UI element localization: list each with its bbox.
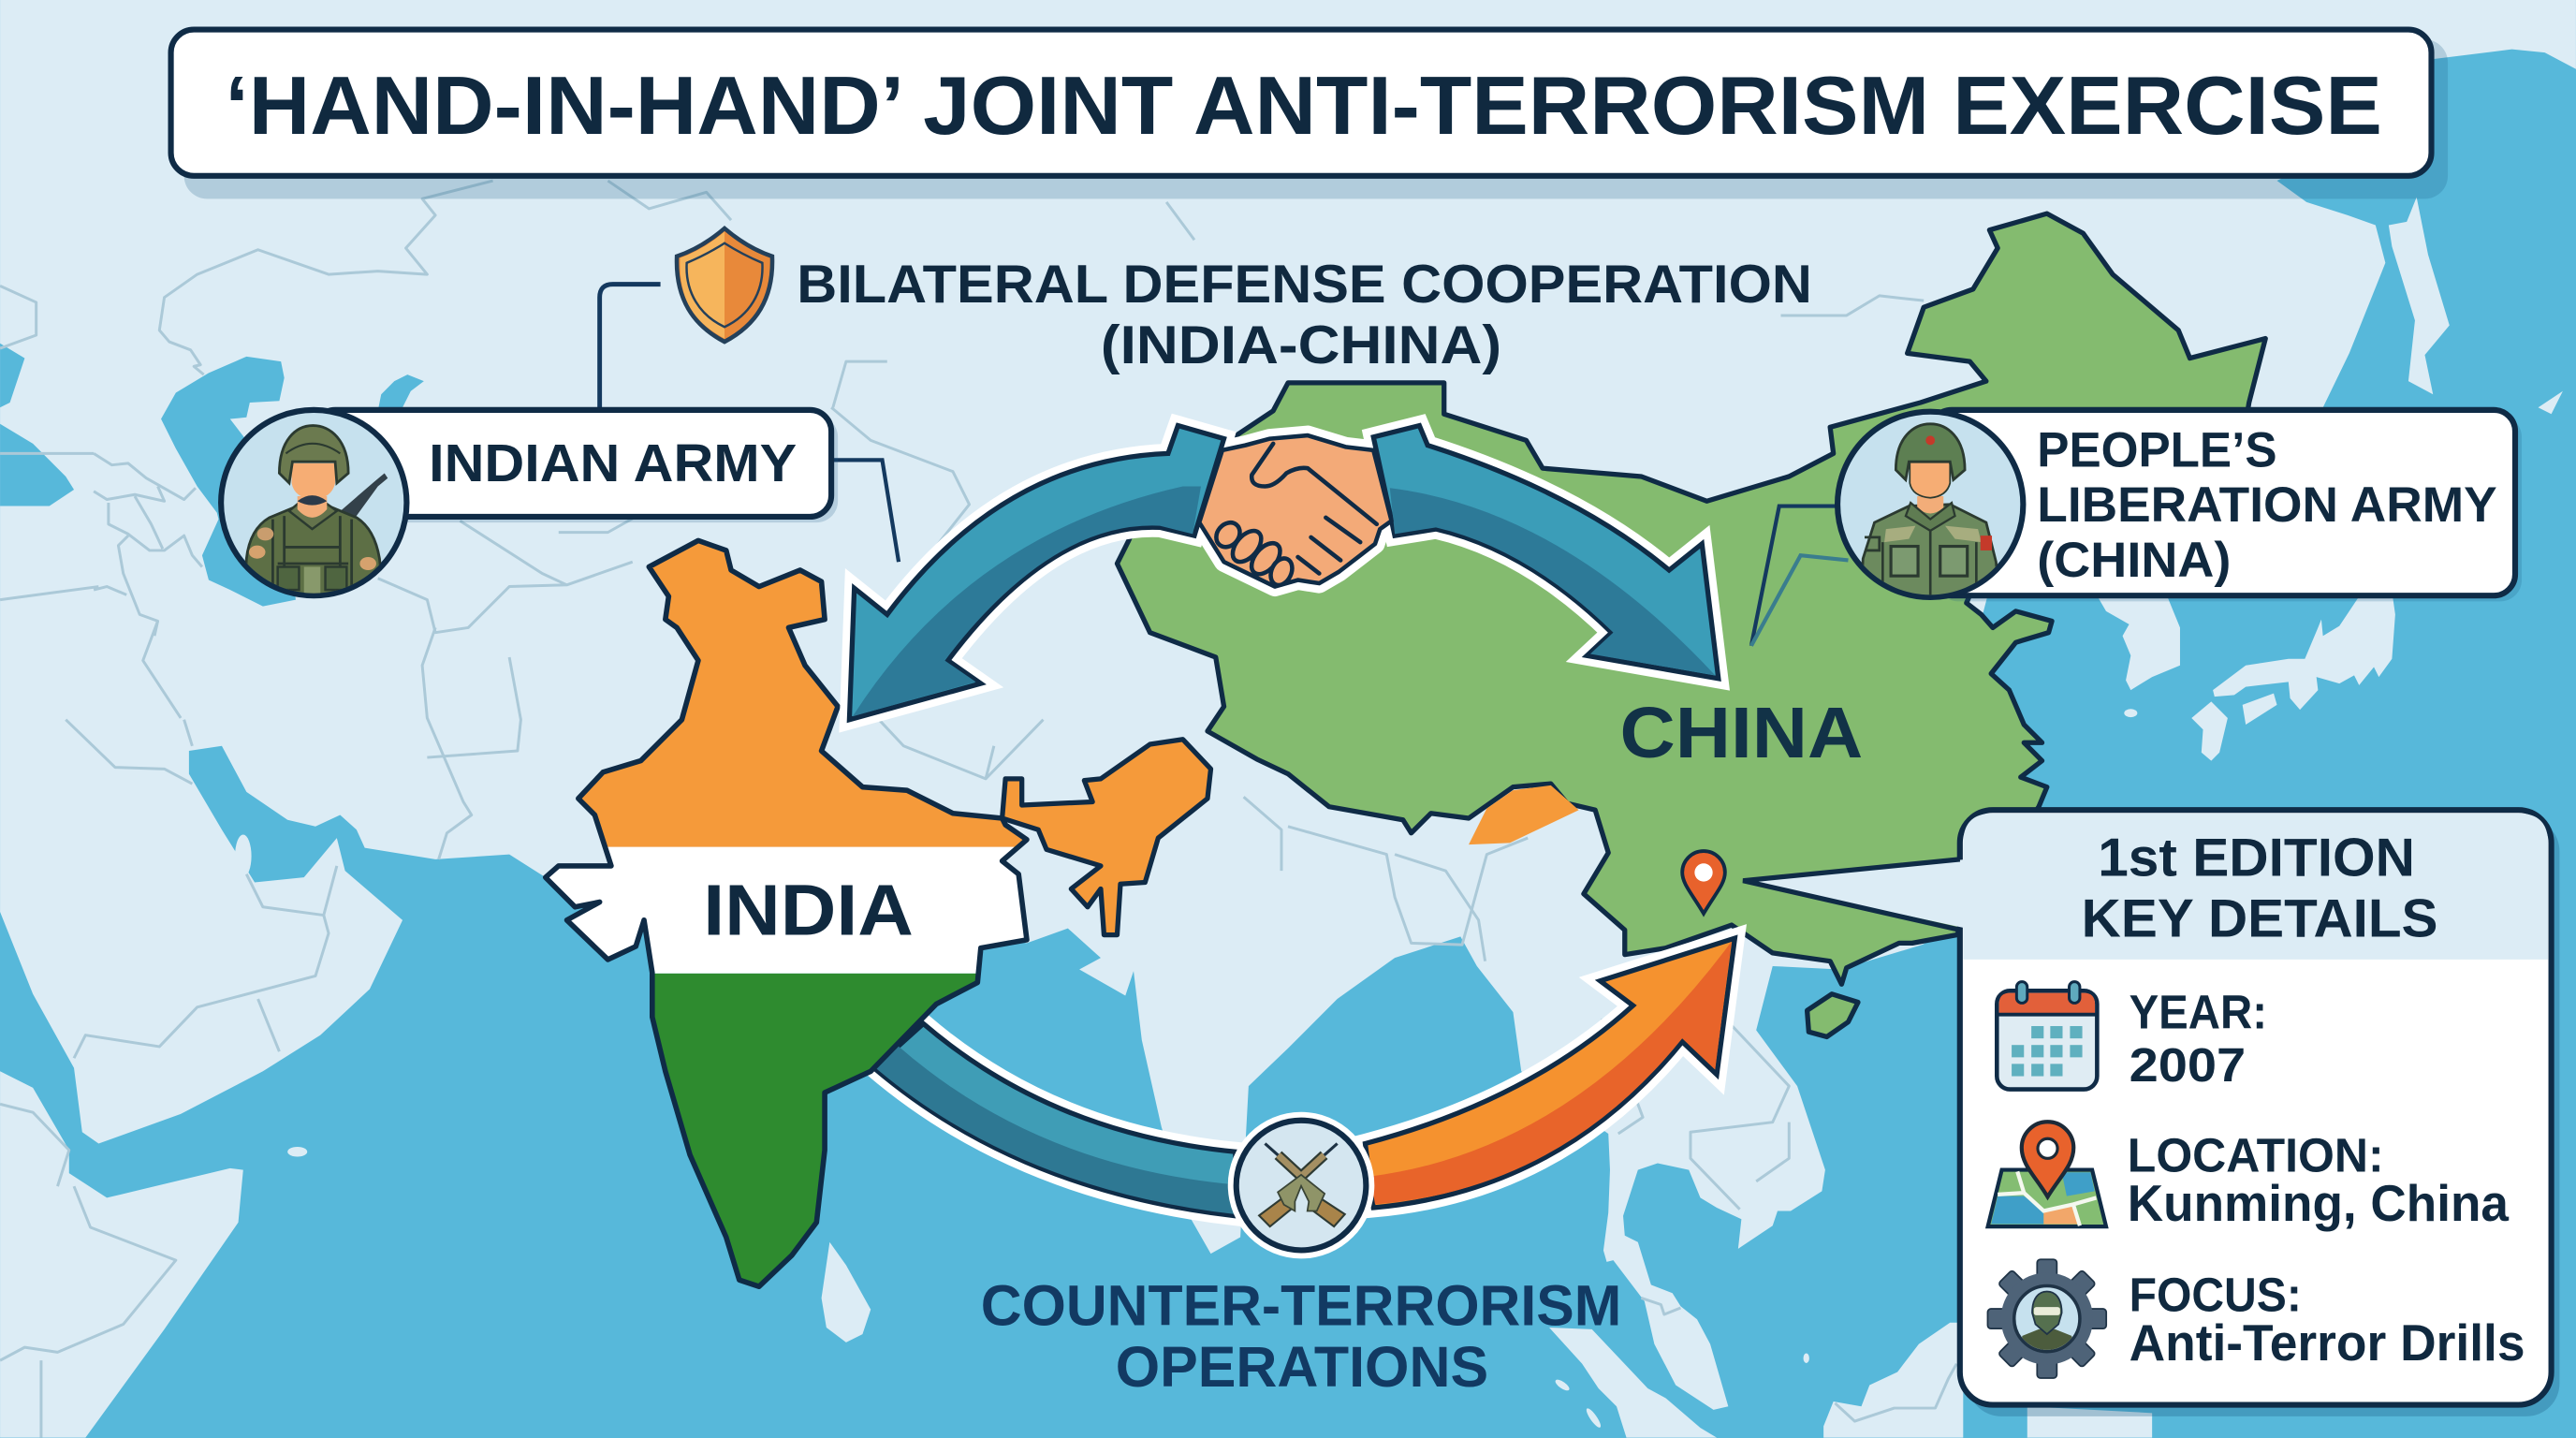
panel heading	[2082, 828, 2438, 948]
heading: bilateral defense cooperation: BILATERAL DEFENSE COOPERATION	[797, 255, 1812, 315]
text: Indian Army: INDIAN ARMY	[429, 433, 797, 492]
text: People's Liberation Army: PEOPLE’S	[2037, 422, 2277, 477]
land: Africa	[0, 1071, 243, 1438]
heading: bilateral defense cooperation: (INDIA-CHINA)	[1101, 315, 1501, 375]
icon: handshake	[1199, 435, 1392, 589]
heading: bilateral defense cooperation	[797, 255, 1812, 375]
border lines	[0, 181, 1956, 1438]
icon: crossed rifles	[1228, 1112, 1374, 1258]
text: focus: Anti-Terror Drills	[2130, 1314, 2525, 1372]
label: Indian Army	[221, 410, 838, 595]
inland seas	[0, 344, 424, 607]
Hainan island	[1808, 994, 1858, 1036]
text: People's Liberation Army: (CHINA)	[2037, 533, 2231, 588]
arrow: handshake to India	[849, 426, 1224, 720]
white halos behind the upper arrows and handshake	[849, 426, 1719, 720]
text: year: YEAR:	[2130, 986, 2267, 1039]
connector: PLA to China	[1751, 506, 1848, 646]
text: focus: FOCUS:	[2130, 1269, 2302, 1322]
heading: counter-terrorism operations: OPERATIONS	[1116, 1335, 1488, 1400]
label: INDIA: INDIA	[703, 871, 914, 951]
title text: ‘HAND-IN-HAND’ JOINT ANTI-TERRORISM EXERCISE	[225, 60, 2382, 152]
icon: gear with soldier	[1987, 1259, 2106, 1378]
islands	[235, 198, 2563, 1438]
icon: calendar	[1997, 982, 2097, 1090]
arrow: handshake to China	[1373, 426, 1719, 679]
Northeast India	[1003, 740, 1211, 935]
label: People's Liberation Army	[1837, 410, 2522, 601]
panel heading: 1st EDITION	[2098, 828, 2415, 888]
arrow: orange arrow to Kunming	[1365, 938, 1734, 1208]
map: China in green	[1117, 213, 2265, 1036]
panel: 1st edition key details	[1743, 810, 2559, 1416]
map: India in flag colours	[526, 526, 1211, 1302]
map pin: Kunming	[1682, 851, 1725, 914]
text: year	[2130, 986, 2267, 1092]
label: CHINA: CHINA	[1620, 693, 1863, 773]
callout pointer	[1743, 859, 1967, 929]
icon: location map	[1988, 1122, 2106, 1226]
connector: Indian Army to India	[831, 460, 899, 562]
text: location: Kunming, China	[2128, 1175, 2510, 1232]
text: location	[2128, 1128, 2510, 1232]
text: People's Liberation Army: LIBERATION ARMY	[2037, 477, 2497, 533]
heading: counter-terrorism operations: COUNTER-TERRORISM	[981, 1273, 1621, 1338]
panel heading: KEY DETAILS	[2082, 888, 2438, 948]
text: location: LOCATION:	[2128, 1128, 2384, 1181]
icon: Indian soldier	[245, 426, 388, 594]
title banner	[171, 30, 2448, 198]
text: focus	[2130, 1269, 2525, 1372]
icon: defense shield	[677, 228, 772, 342]
Arunachal region in orange	[1469, 785, 1579, 844]
text: year: 2007	[2130, 1038, 2246, 1092]
connector: shield to Indian Army	[600, 285, 661, 407]
icon: PLA soldier	[1862, 424, 1999, 598]
text: People's Liberation Army	[2037, 422, 2497, 588]
heading: counter-terrorism operations	[981, 1273, 1621, 1400]
arrow: counter-terrorism band from India	[874, 1023, 1236, 1216]
